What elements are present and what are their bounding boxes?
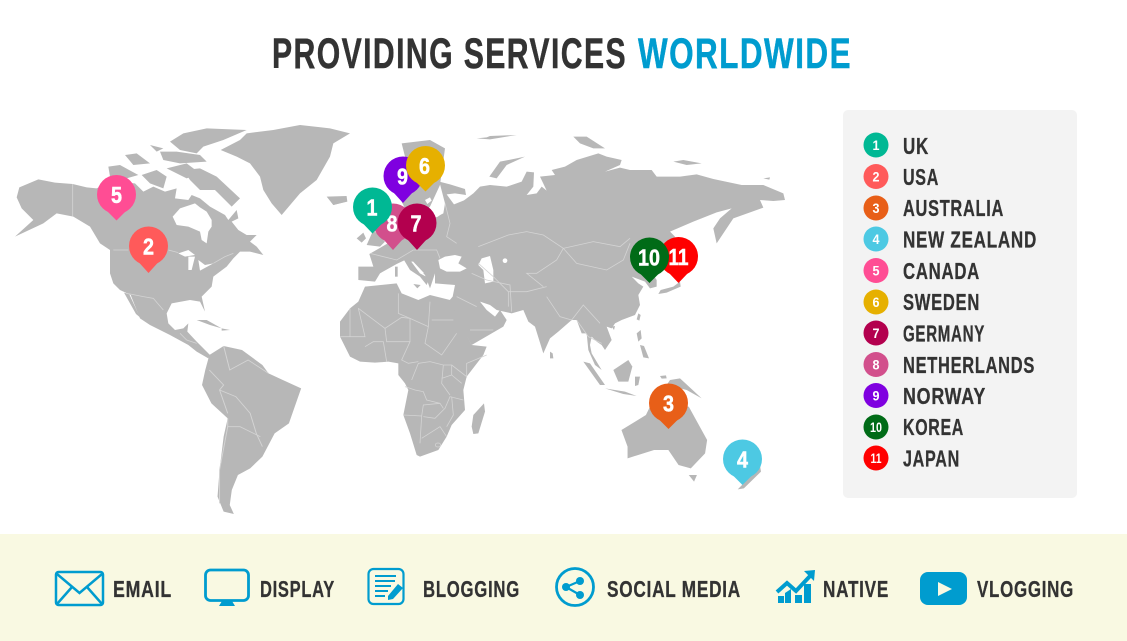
legend item: Sweden (864, 289, 980, 315)
legend item: Japan: 11 (870, 450, 882, 466)
pin 3: Australia (649, 384, 688, 429)
legend item: UK (864, 132, 929, 159)
legend item: Norway (864, 383, 986, 409)
legend item: Canada: CANADA (903, 258, 980, 284)
pin 10: Korea: 10 (638, 244, 660, 270)
icon: blogging note (368, 569, 404, 604)
pin 8: Netherlands (374, 204, 412, 250)
icon: vlogging play button (920, 572, 967, 605)
label: vlogging: VLOGGING (977, 576, 1074, 602)
pin 5: Canada: 5 (111, 182, 122, 208)
title: WORLDWIDE (638, 30, 852, 78)
legend item: New Zealand: 4 (872, 231, 880, 247)
pin 9: Norway (384, 156, 422, 203)
pin 7: Germany: 7 (410, 210, 422, 236)
legend item: New Zealand: NEW ZEALAND (903, 226, 1037, 252)
legend item: Australia (864, 195, 1004, 221)
legend item: Netherlands: NETHERLANDS (903, 352, 1035, 378)
panel: services footer (0, 534, 1127, 641)
icon: display monitor (206, 570, 248, 606)
pin 11: Japan (659, 237, 698, 283)
legend item: Canada: 5 (872, 262, 880, 278)
pin 6: Sweden (406, 146, 445, 192)
pin 1: UK: 1 (366, 194, 378, 220)
pin 7: Germany (398, 204, 436, 250)
panel: legend (843, 110, 1077, 498)
legend item: Sweden: SWEDEN (903, 289, 980, 315)
legend item: Japan (864, 446, 960, 472)
world map (15, 125, 785, 514)
pin 3: Australia: 3 (663, 390, 674, 416)
title: PROVIDING SERVICES (272, 30, 627, 78)
pin 10: Korea (630, 238, 669, 283)
pin 1: UK (353, 188, 392, 234)
legend item: Korea: 10 (870, 419, 882, 435)
label: email: EMAIL (113, 576, 172, 602)
pin 9: Norway: 9 (397, 164, 408, 190)
legend item: Sweden: 6 (872, 294, 880, 310)
pin 5: Canada (97, 175, 136, 220)
legend item: Korea: KOREA (903, 414, 964, 440)
legend item: New Zealand (864, 226, 1037, 252)
pin 6: Sweden: 6 (419, 153, 430, 179)
icon: native growth chart (777, 570, 815, 603)
legend item: Netherlands (864, 352, 1035, 378)
legend item: Canada (864, 258, 980, 284)
legend item: Norway: 9 (872, 388, 880, 404)
legend item: Australia: 3 (872, 200, 880, 216)
legend item: USA: 2 (872, 168, 880, 184)
legend item: Australia: AUSTRALIA (903, 195, 1004, 221)
legend item: Netherlands: 8 (872, 356, 880, 372)
pin 2: USA: 2 (143, 234, 154, 260)
pin 8: Netherlands: 8 (386, 210, 398, 236)
icon: email envelope (56, 572, 103, 605)
legend item: USA: USA (903, 164, 939, 190)
label: display: DISPLAY (260, 576, 335, 602)
label: blogging: BLOGGING (423, 576, 520, 602)
legend item: Korea (864, 414, 964, 440)
legend item: Germany: 7 (872, 325, 880, 341)
label: native: NATIVE (823, 576, 889, 602)
legend item: USA (864, 164, 939, 190)
pin 11: Japan: 11 (668, 244, 689, 270)
legend item: Norway: NORWAY (903, 383, 986, 409)
legend item: Germany: GERMANY (903, 320, 985, 346)
pin 4: New Zealand (723, 440, 762, 485)
legend item: UK: 1 (872, 137, 880, 153)
label: social media: SOCIAL MEDIA (607, 576, 741, 602)
pin 2: USA (129, 226, 168, 273)
legend item: Japan: JAPAN (903, 446, 960, 472)
legend item: UK: UK (903, 133, 929, 159)
icon: social share (556, 568, 594, 606)
pin 4: New Zealand: 4 (737, 446, 748, 472)
legend item: Germany (864, 320, 985, 346)
